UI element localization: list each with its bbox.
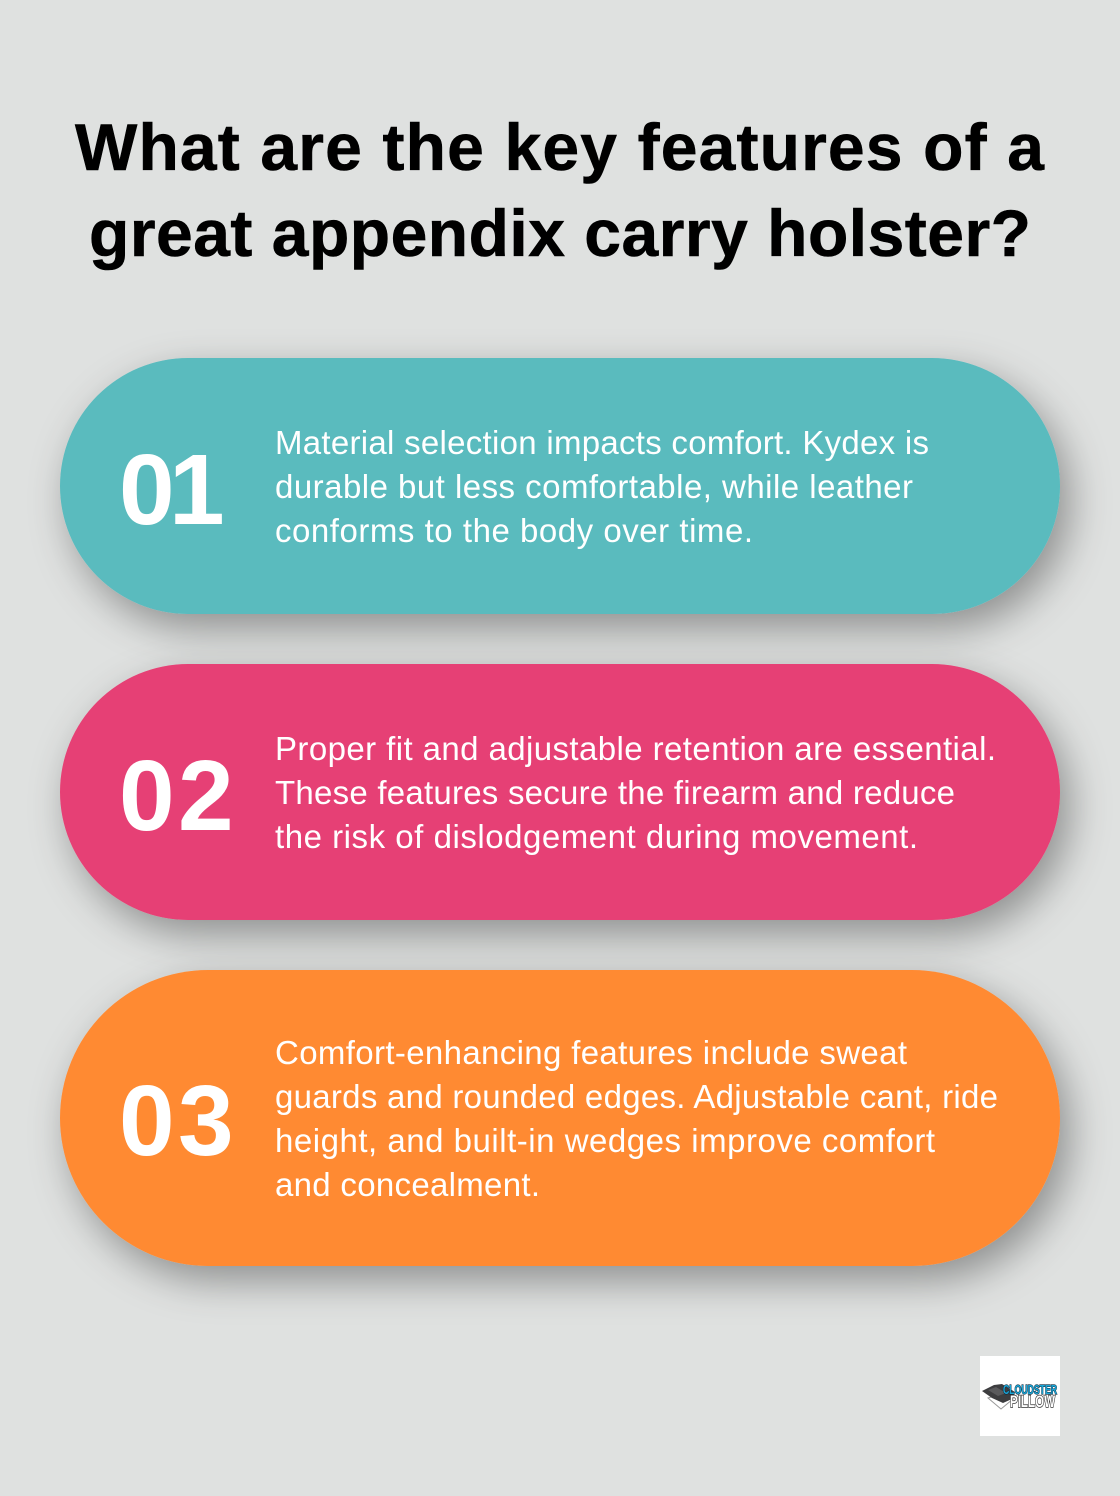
text: proper fit [275,730,996,855]
text: material selection: Material selection impacts comfort. Kydex is [275,424,929,461]
number 01: 01 [119,434,225,546]
text: comfort features: height, and built-in wedges improve comfort [275,1122,935,1159]
title: great appendix carry holster? [89,196,1031,270]
logo: Cloudster Pillow [980,1356,1060,1436]
text: comfort features [275,1034,998,1203]
text: material selection: durable but less comfortable, while leather [275,468,913,505]
title: What are the key features of a [75,110,1045,184]
panel: feature 02 fit and retention [60,664,1060,920]
number 02: 02 [119,740,234,852]
orange pill background [60,970,1060,1266]
text: material selection: conforms to the body over time. [275,512,753,549]
logo wordmark: CLOUDSTER [1003,1382,1057,1397]
text: comfort features: Comfort-enhancing features include sweat [275,1034,907,1071]
panel: feature 01 material [60,358,1060,614]
logo wordmark [1003,1382,1057,1411]
icon: pillow [982,1384,1015,1409]
pink pill background [60,664,1060,920]
panel: feature 03 comfort [60,970,1060,1266]
logo wordmark: PILLOW [1010,1392,1056,1411]
title [75,110,1045,270]
text: proper fit: the risk of dislodgement during movement. [275,818,918,855]
text: comfort features: guards and rounded edges. Adjustable cant, ride [275,1078,998,1115]
text: proper fit: These features secure the firearm and reduce [275,774,955,811]
text: proper fit: Proper fit and adjustable retention are essential. [275,730,996,767]
number 03: 03 [119,1065,234,1177]
text: comfort features: and concealment. [275,1166,540,1203]
text: material selection [275,424,929,549]
teal pill background [60,358,1060,614]
